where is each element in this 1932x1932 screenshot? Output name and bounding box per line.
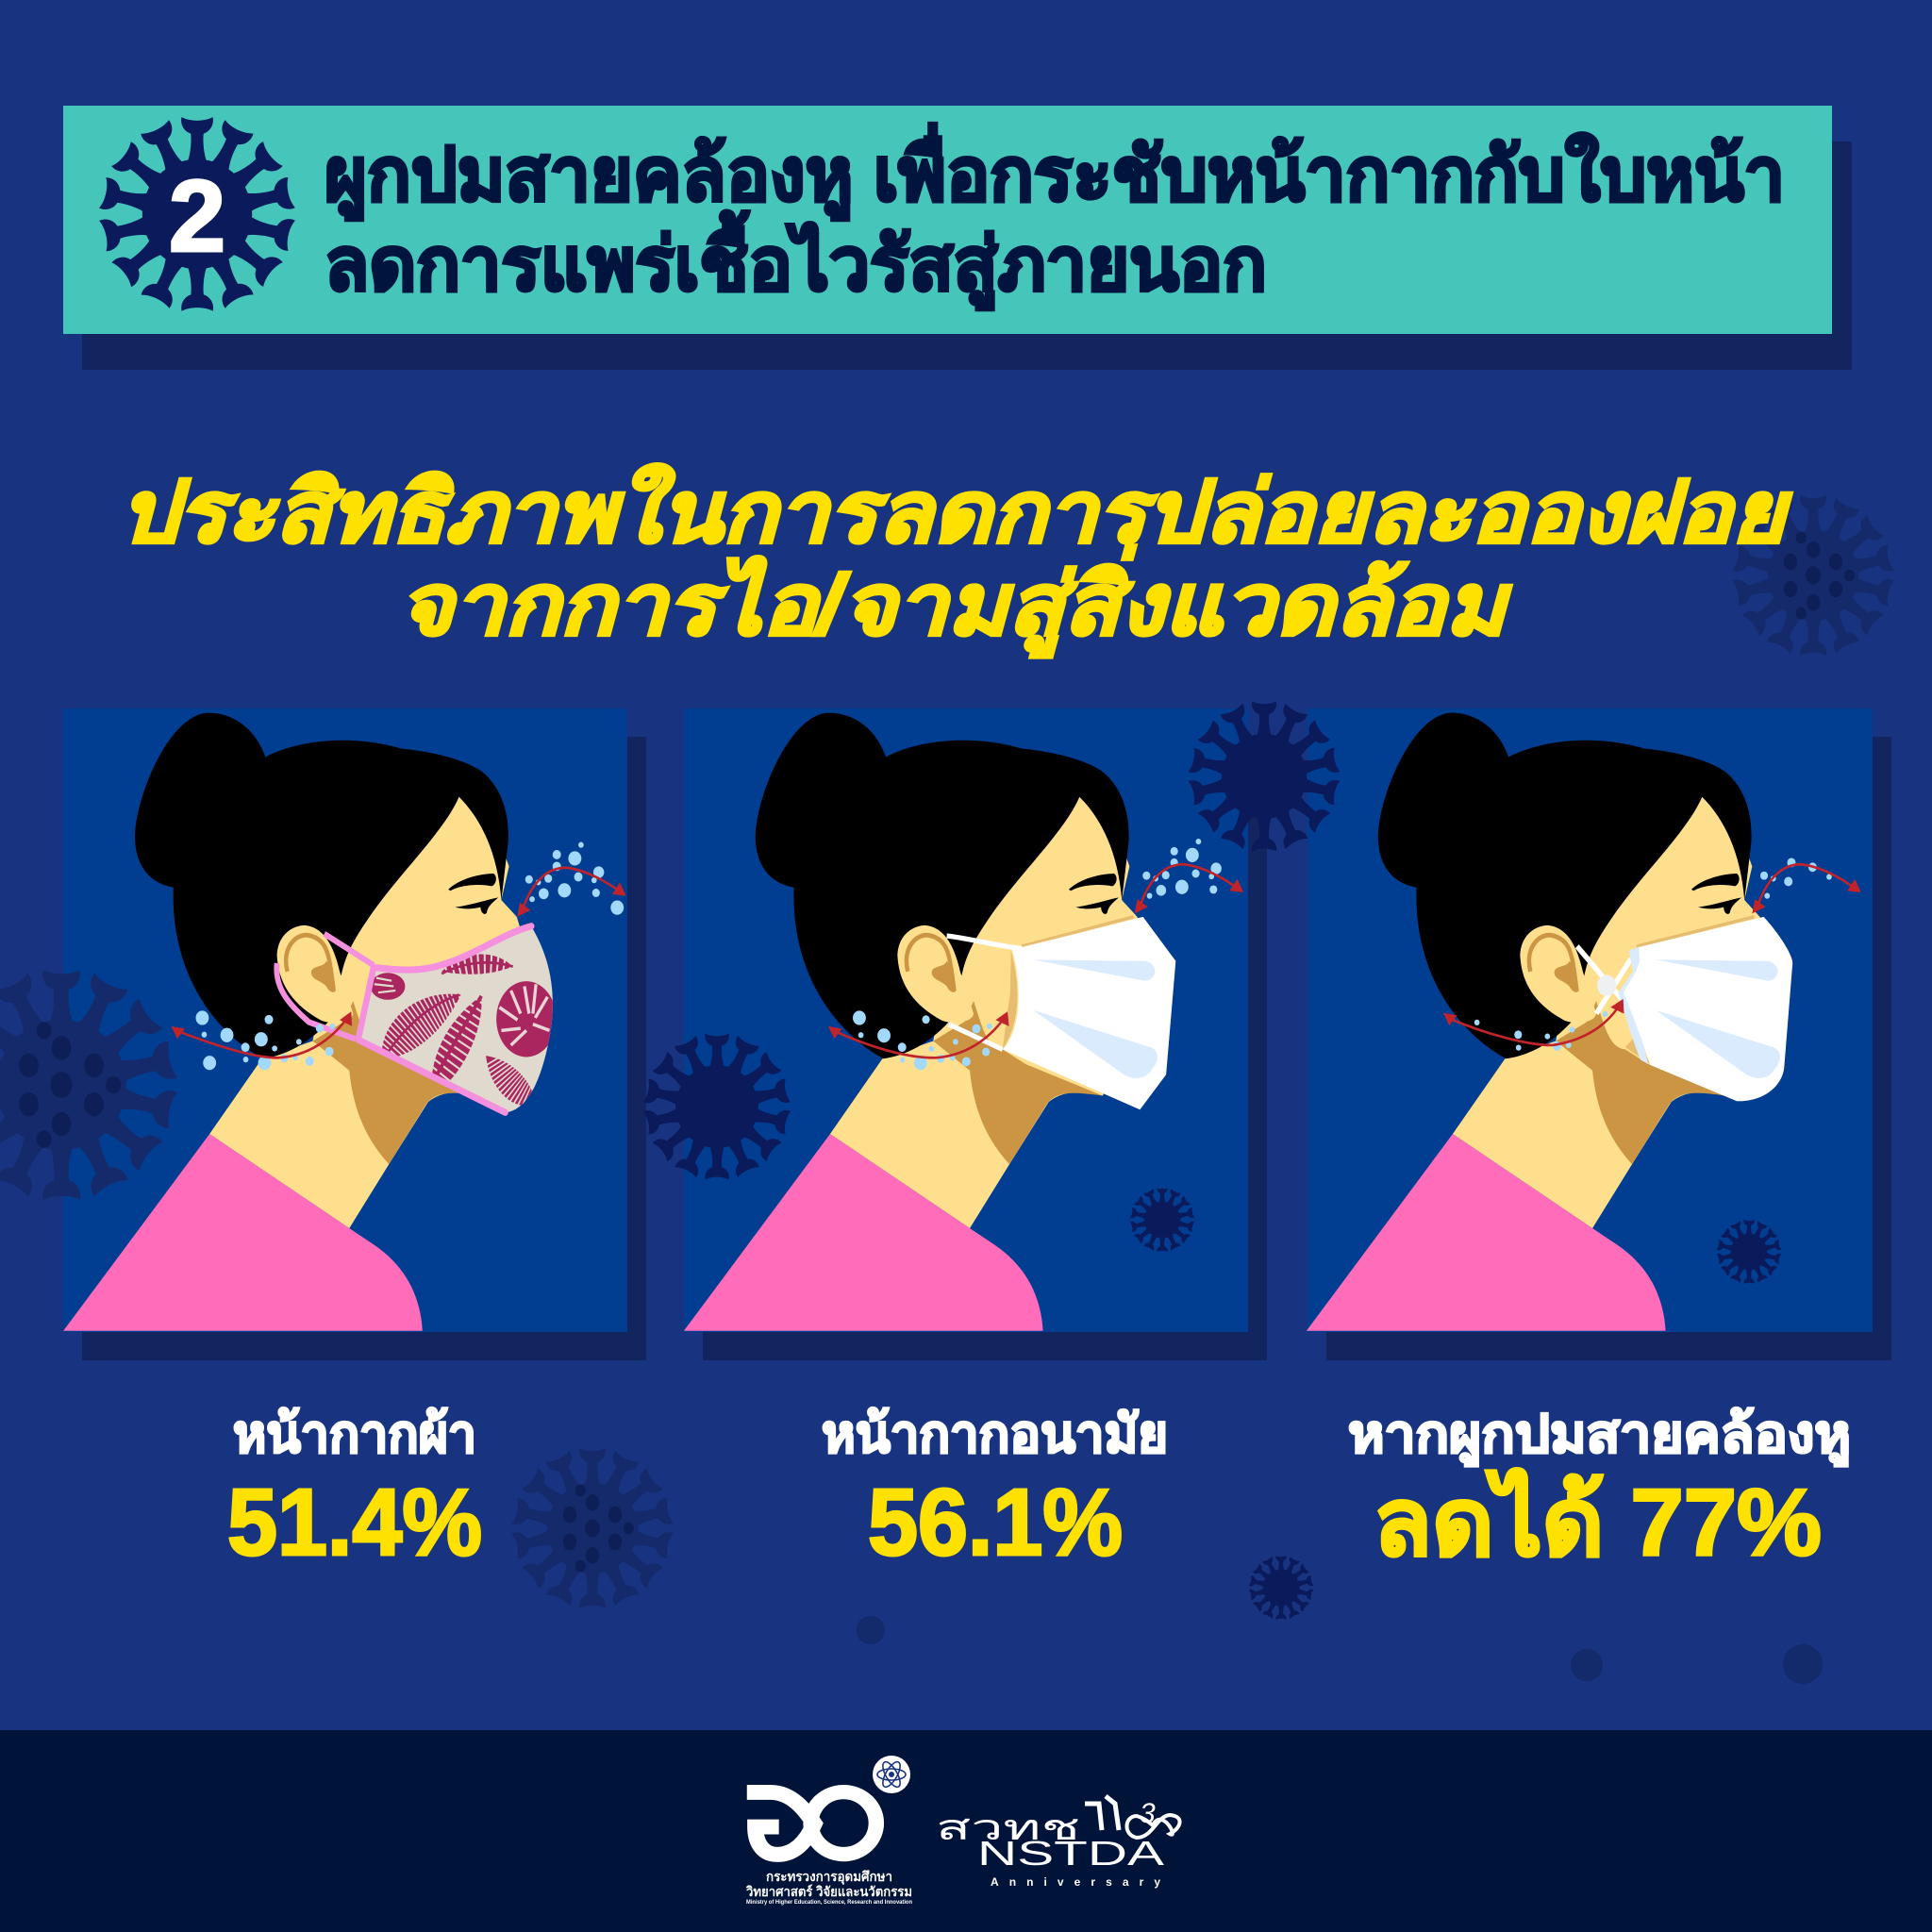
stat: cloth mask: 51.4% <box>227 1470 482 1575</box>
stat: knotted loops <box>1348 1405 1851 1575</box>
arrows <box>1443 864 1861 1045</box>
panel: knotted ear loops <box>1307 708 1873 1332</box>
droplets <box>1474 858 1832 1051</box>
stat: surgical mask: หน้ากากอนามัย <box>822 1405 1168 1463</box>
logo: NSTDA: 3 <box>1140 1798 1156 1829</box>
stat: knotted loops: หากผูกปมสายคล้องหู <box>1348 1405 1851 1467</box>
logo: NSTDA: Anniversary <box>991 1875 1160 1889</box>
panel: surgical mask <box>684 708 1248 1332</box>
title: ประสิทธิภาพในการลดการปล่อยละอองฝอย <box>120 463 1792 560</box>
stat: cloth mask <box>227 1405 482 1575</box>
logo: ministry: Ministry of Higher Education, Science, Research and Innovation <box>746 1900 912 1906</box>
heading: header line 1: ผูกปมสายคล้องหู เพื่อกระชับหน้ากากกับใบหน้า <box>325 123 1785 221</box>
logo: ministry <box>745 1756 912 1906</box>
arrows <box>171 868 626 1058</box>
icon: virus badge with number 2: 2 <box>169 158 225 273</box>
cloth mask <box>276 924 557 1112</box>
droplets <box>853 839 1222 1070</box>
footer band <box>0 1730 1932 1932</box>
header banner <box>63 106 1852 370</box>
palm frond 2 <box>432 996 482 1083</box>
logo: NSTDA: NSTDA <box>977 1834 1164 1873</box>
decorative virus: small panel 2 <box>1130 1188 1194 1252</box>
logo: ministry: วิทยาศาสตร์ วิจัยและนวัตกรรม <box>745 1884 912 1899</box>
stat: cloth mask: หน้ากากผ้า <box>233 1405 476 1463</box>
decorative virus: panel 1/2 gap <box>643 1034 791 1179</box>
decorative virus: top of panel 2/3 <box>1189 702 1340 852</box>
decorative virus: lower middle <box>511 1448 674 1608</box>
decorative virus: small lower <box>1249 1556 1313 1620</box>
palm frond 1 <box>382 994 461 1060</box>
panel shadows <box>82 737 1891 1360</box>
decorative virus: left <box>0 970 177 1200</box>
stat: knotted loops: ลดได้ 77% <box>1374 1469 1822 1575</box>
stat: surgical mask <box>822 1405 1168 1575</box>
palm frond 4 <box>486 1056 536 1106</box>
droplets <box>195 842 624 1070</box>
surgical mask <box>947 917 1175 1109</box>
arrows <box>828 864 1243 1058</box>
decorative virus: small panel 3 <box>1717 1220 1781 1284</box>
heading: header line 2: ลดการแพร่เชื้อไวรัสสู่ภายนอก <box>325 210 1267 310</box>
palm frond 3 <box>441 955 513 974</box>
decorative dots <box>857 1616 1823 1684</box>
logo: NSTDA: สวทช <box>936 1808 1080 1848</box>
decorative virus: top right <box>1732 495 1894 656</box>
icon: virus badge with number 2 <box>99 117 295 311</box>
monstera leaves <box>371 973 405 1000</box>
logo: NSTDA <box>936 1796 1180 1889</box>
knotted mask <box>1577 917 1792 1101</box>
stat: surgical mask: 56.1% <box>868 1470 1123 1575</box>
logo: ministry: กระทรวงการอุดมศึกษา <box>766 1869 892 1885</box>
title: จากการไอ/จามสู่สิ่งแวดล้อม <box>399 545 1511 658</box>
panel: cloth mask <box>63 708 627 1332</box>
title <box>120 463 1792 658</box>
icon: atom badge <box>873 1756 910 1793</box>
